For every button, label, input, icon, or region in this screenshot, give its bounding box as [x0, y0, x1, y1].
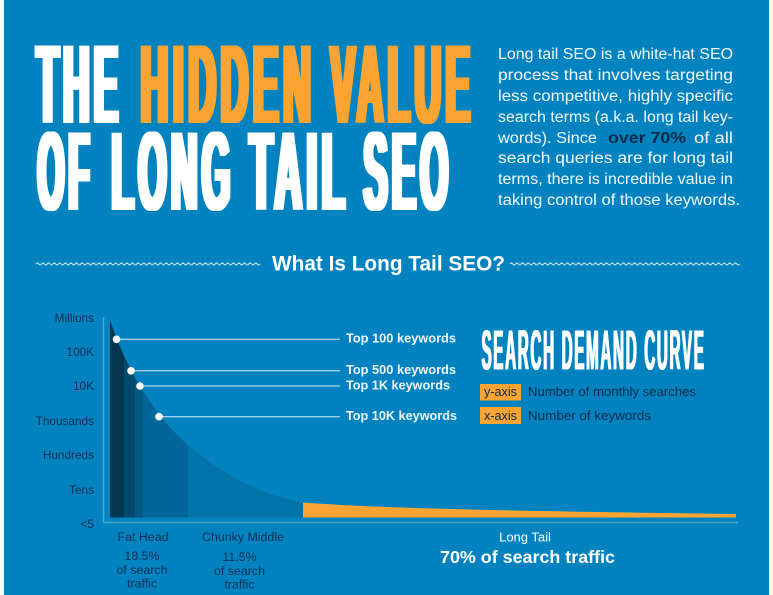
legend: x-axis: Number of keywords [528, 408, 652, 423]
title: HIDDEN [141, 22, 316, 147]
intro paragraph: of all [694, 130, 733, 147]
fat head band: top 100 [110, 315, 124, 518]
chunky middle label [202, 530, 284, 592]
legend: y-axis: Number of monthly searches [528, 384, 696, 399]
fat head label: 18.5% [124, 549, 160, 563]
legend: y-axis [480, 384, 696, 400]
callout: top 10K [155, 409, 457, 423]
text: SEO [364, 109, 453, 234]
title [37, 22, 475, 234]
chart axes [104, 317, 738, 522]
long tail orange area [303, 502, 736, 518]
long tail label: 70% of search traffic [440, 547, 615, 567]
y-axis labels: Millions [55, 311, 94, 325]
search demand curve chart [110, 315, 736, 518]
y-axis labels: Thousands [36, 414, 94, 428]
callout: top 100: Top 100 keywords [346, 332, 456, 346]
intro paragraph: words). Since [497, 130, 597, 147]
chunky middle band [188, 445, 303, 518]
intro paragraph: Long tail SEO is a white-hat SEO [498, 46, 733, 63]
fat head label: traffic [127, 576, 157, 590]
right wavy line [510, 263, 740, 265]
title: TAIL [250, 109, 350, 234]
heading text: What Is Long Tail SEO? [272, 252, 505, 276]
intro paragraph: search terms (a.k.a. long tail key- [498, 109, 733, 126]
legend [480, 384, 696, 424]
long tail label [440, 530, 615, 567]
keyword callouts [113, 332, 457, 423]
y-axis labels: Hundreds [43, 448, 94, 462]
intro paragraph: taking control of those keywords. [498, 192, 740, 209]
legend: y-axis: y-axis [484, 384, 517, 399]
callout: top 1K [136, 378, 450, 392]
intro paragraph: search queries are for long tail [498, 150, 733, 167]
fat head band: top 10K [143, 391, 188, 518]
intro paragraph: over 70% [608, 130, 686, 147]
chunky middle label: of search [214, 564, 265, 578]
intro paragraph: less competitive, highly specific [498, 88, 733, 105]
long tail label: Long Tail [499, 530, 551, 544]
chunky middle label: Chunky Middle [202, 530, 284, 544]
fat head band: top 500 [124, 356, 135, 518]
callout: top 100 [113, 332, 456, 346]
text: VALUE [331, 22, 475, 147]
y-axis labels: Tens [69, 483, 94, 497]
fat head label: of search [117, 563, 168, 577]
fat head label: Fat Head [118, 530, 169, 544]
title: OF [38, 109, 94, 234]
y-axis labels: 10K [73, 379, 94, 393]
title: THE [37, 22, 123, 147]
intro paragraph: process that involves targeting [498, 67, 733, 84]
fat head band: top 1K [135, 378, 143, 518]
title: LONG [112, 109, 235, 234]
y-axis labels: 100K [66, 345, 94, 359]
callout: top 1K: Top 1K keywords [346, 378, 450, 392]
chunky middle label: traffic [224, 578, 255, 592]
callout: top 500 [127, 363, 456, 377]
callout: top 500: Top 500 keywords [346, 363, 456, 377]
fat head label [117, 530, 169, 590]
legend: x-axis [480, 407, 652, 424]
legend: x-axis: x-axis [484, 408, 517, 423]
y-axis labels: <5 [81, 517, 94, 531]
left wavy line [36, 263, 260, 265]
intro paragraph [497, 46, 740, 209]
intro paragraph: terms, there is incredible value in [498, 171, 733, 188]
chunky middle label: 11.5% [222, 550, 257, 564]
callout: top 10K: Top 10K keywords [346, 409, 457, 423]
y-axis labels [36, 311, 94, 531]
